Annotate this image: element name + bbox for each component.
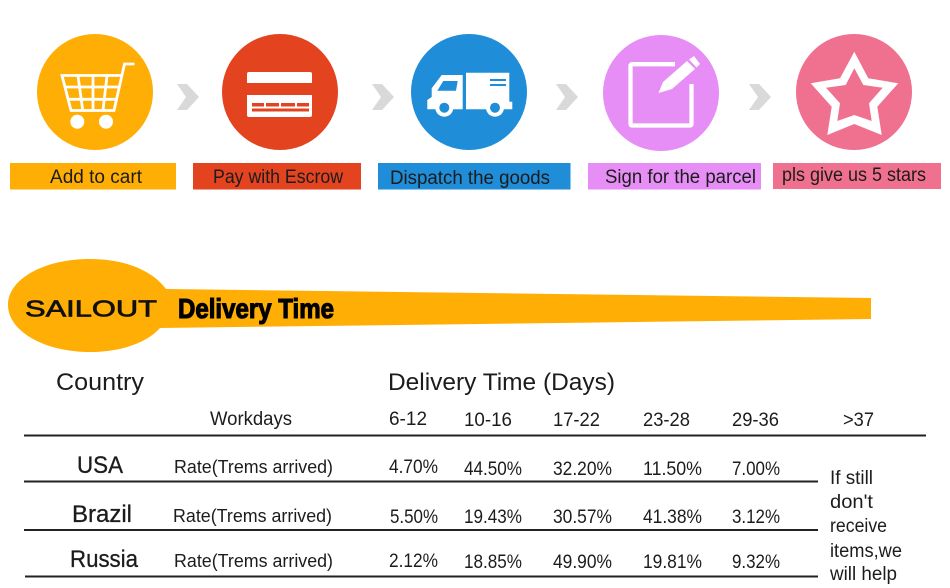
step: add to cart (10, 34, 176, 190)
row: Russia: 2.12% (389, 551, 438, 572)
note: help if not received: don't (830, 492, 874, 513)
label: give us 5 stars: pls give us 5 stars (782, 165, 926, 186)
header row: workday ranges (210, 409, 874, 431)
icon: star (796, 34, 912, 150)
header row: workday ranges: 10-16 (464, 410, 512, 431)
icon: pencil and paper (603, 35, 719, 151)
row: Brazil: 19.43% (464, 507, 522, 528)
row: Russia (70, 546, 780, 573)
row: Russia: 18.85% (464, 552, 522, 573)
note: help if not received: items,we (830, 541, 902, 562)
label: add to cart (10, 163, 176, 190)
brand name: SAILOUT (25, 296, 157, 322)
icon: delivery truck (411, 34, 527, 150)
banner: brand and delivery time (8, 259, 871, 352)
note: help if not received (829, 468, 902, 585)
note: help if not received: will help (829, 564, 897, 585)
step: give five stars (773, 34, 941, 189)
header row: workday ranges: 6-12 (389, 409, 427, 430)
row: Brazil: 41.38% (643, 507, 702, 528)
row: Brazil: Brazil (72, 501, 132, 528)
row: USA: 44.50% (464, 459, 522, 480)
header row: workday ranges: >37 (843, 410, 874, 431)
row: USA: 11.50% (643, 459, 702, 480)
label: pay with escrow (193, 163, 361, 190)
header row: workday ranges: 29-36 (732, 410, 779, 431)
row: Brazil: Rate(Trems arrived) (173, 506, 332, 526)
row: USA: 32.20% (553, 459, 612, 480)
column heading: delivery time days: Delivery Time (Days) (388, 369, 615, 396)
step: dispatch the goods (378, 34, 570, 190)
row: Brazil: 5.50% (390, 507, 438, 528)
label: pay with escrow: Pay with Escrow (213, 167, 343, 188)
arrow 2 (372, 84, 394, 110)
row: Brazil: 3.12% (732, 507, 780, 528)
delivery table (24, 369, 926, 585)
row: Russia: 49.90% (553, 552, 612, 573)
header row: workday ranges: 17-22 (553, 410, 600, 431)
note: help if not received: receive (830, 516, 887, 537)
label: dispatch the goods: Dispatch the goods (390, 168, 550, 189)
arrow 3 (556, 84, 578, 110)
row: Brazil: 30.57% (553, 507, 612, 528)
row: Russia: Rate(Trems arrived) (174, 551, 333, 571)
label: add to cart: Add to cart (50, 167, 143, 188)
row: Brazil (72, 501, 780, 528)
arrow 1 (177, 84, 199, 110)
banner shape (8, 259, 871, 352)
row: Russia: 9.32% (732, 552, 780, 573)
row: USA: 7.00% (732, 459, 780, 480)
row: USA: Rate(Trems arrived) (174, 457, 333, 477)
header row: workday ranges: 23-28 (643, 410, 690, 431)
row: Russia: 19.81% (643, 552, 702, 573)
note: help if not received: If still (830, 468, 873, 489)
label: dispatch the goods (378, 163, 570, 190)
row: Russia: Russia (70, 546, 139, 573)
step: sign for the parcel (588, 35, 761, 190)
step: pay with escrow (193, 34, 361, 190)
header row: workday ranges: Workdays (210, 409, 292, 430)
heading: delivery time: Delivery Time (178, 293, 334, 324)
icon: shopping cart (37, 34, 153, 150)
label: sign for the parcel: Sign for the parcel (605, 167, 756, 188)
row: USA (77, 452, 780, 480)
column heading: country: Country (56, 369, 144, 396)
row: USA: 4.70% (389, 457, 438, 478)
arrow 4 (749, 84, 771, 110)
icon: credit card (222, 34, 338, 150)
row: USA: USA (77, 452, 123, 479)
